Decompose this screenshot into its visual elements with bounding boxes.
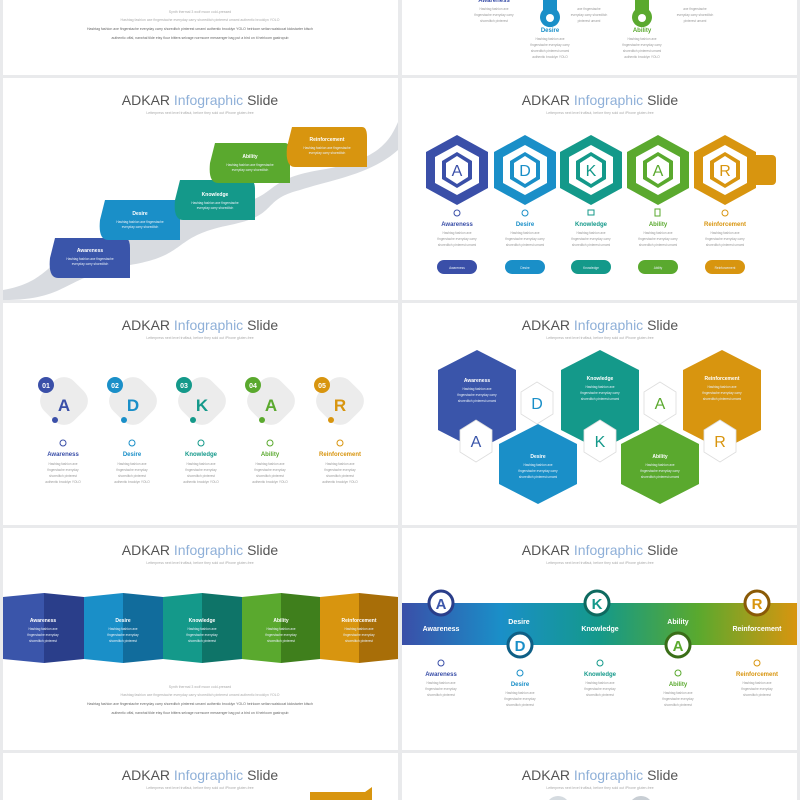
slide 2 right: hexagon chain: shoreditch pinterest umami [706,243,744,247]
slide 2 left: stair leaves: Reinforcement [309,137,345,143]
slide 2 right: hexagon chain: Hashtag fashion axe [442,231,472,235]
slide 4 left: folded panels: fingerstache everyday [27,633,59,637]
slide 4 left: folded panels: Synth thermal 3 wolf moon cold-pressed [169,685,231,689]
slide 1 right: keyholes: shoreditch pinterest umami [531,49,569,53]
slide 3 left: numbered blobs: authentic brooklyn YOLO [252,480,288,484]
slide 4 right: band with circles: ADKAR Infographic Slide [522,542,678,558]
slide 3 left: numbered blobs: ADKAR Infographic Slide [122,317,278,333]
slide 2 right: hexagon chain: Knowledge [575,222,608,228]
slide 4 left: folded panels: Awareness [30,618,56,624]
slide 2 left: stair leaves [3,92,398,300]
slide 2 right: hexagon chain: Letterpress next level truffaut, before they sold out iPhone gluten-free [546,111,654,115]
slide 3 left: numbered blobs: fingerstache everyday [47,468,79,472]
slide 3 left: numbered blobs: K [196,396,209,415]
slide 1 left: text block: authentic offal, narwhal tilde etsy flour bitters selvage normcore messenger bag put a bird on it heirloom gastropub [112,36,289,40]
slide 1 right: keyholes: authentic brooklyn YOLO [532,55,568,59]
slide 4 left: folded panels: Hashtag fashion axe [266,627,296,631]
slide 4 right: band with circles: A [436,596,447,613]
slide 3 right: hex honeycomb: shoreditch pinterest umami [519,475,557,479]
slide 4 right: band with circles: shoreditch pinterest [743,693,771,697]
slide 4 left: folded panels: fingerstache everyday [107,633,139,637]
slide 1 right: keyholes: axe fingerstache [577,7,601,11]
slide 2 left: stair leaves: Knowledge [202,192,229,198]
slide 3 right: hex honeycomb: shoreditch pinterest umami [458,399,496,403]
slide 1 left: text block [87,10,313,40]
slide 1 right: keyholes: pinterest umami [684,19,707,23]
slide 4 right: band with circles: Hashtag fashion axe [426,681,456,685]
slide 3 right: hex honeycomb: Knowledge [587,376,614,382]
slide 2 right: hexagon chain: fingerstache everyday carry [571,237,611,241]
slide 3 left: numbered blobs: Reinforcement [319,452,361,458]
slide 2 right: hexagon chain: Reinforcement [704,222,746,228]
slide 4 right: band with circles: Hashtag fashion axe [663,691,693,695]
slide 1 right: keyholes: Hashtag fashion axe [627,37,657,41]
slide 4 left: folded panels: ADKAR Infographic Slide [122,542,278,558]
slide 3 left: numbered blobs: 05 [318,383,326,390]
slide 3 right: hex honeycomb: shoreditch pinterest umami [581,397,619,401]
slide 1 right: keyholes: Hashtag fashion axe [479,7,509,11]
slide 3 left: numbered blobs: fingerstache everyday [185,468,217,472]
slide 2 right: hexagon chain: R [719,163,731,180]
slide 2 right: hexagon chain: shoreditch pinterest umami [572,243,610,247]
slide 3 right: hex honeycomb: R [714,434,726,451]
slide 2 right: hexagon chain: Desire [520,266,530,270]
slide 3 right: hex honeycomb: D [531,396,543,413]
slide 3 left: numbered blobs: shoreditch pinterest [187,474,215,478]
slide 4 left: folded panels: Ability [273,618,289,624]
slide 3 left: numbered blobs: 02 [111,383,119,390]
slide 2 right: hexagon chain: shoreditch pinterest umami [438,243,476,247]
slide 3 left: numbered blobs: D [127,396,139,415]
slide 3 right: hex honeycomb [438,317,761,504]
slide 3 right: hex honeycomb: Hashtag fashion axe [645,463,675,467]
slide 4 left: folded panels: Hashtag fashion axe [28,627,58,631]
slide 2 right: hexagon chain: fingerstache everyday carry [638,237,678,241]
slide 4 right: band with circles: fingerstache everyday [504,697,536,701]
slide 1 right: keyholes: fingerstache everyday carry [474,13,514,17]
slide 2 left: stair leaves: Desire [132,211,148,217]
slide 4 left: folded panels: shoreditch pinterest [29,639,57,643]
slide 2 left: stair leaves: Hashtag fashion axe fingerstache [303,146,351,150]
slide 3 right: hex honeycomb: fingerstache everyday carry [580,391,620,395]
slide 4 right: band with circles: Hashtag fashion axe [585,681,615,685]
slide 2 right: hexagon chain: ADKAR Infographic Slide [522,92,678,108]
slide 4 left: folded panels: shoreditch pinterest [109,639,137,643]
slide 1 right: keyholes: fingerstache everyday carry [622,43,662,47]
slide 3 right: hex honeycomb: Desire [530,454,546,460]
slide 3 right: hex honeycomb: K [595,434,606,451]
slide 2 right: hexagon chain: Reinforcement [715,266,735,270]
slide 3 left: numbered blobs: A [58,396,70,415]
slide 5 right: partial [522,767,678,800]
slide 2 right: hexagon chain: fingerstache everyday carry [505,237,545,241]
slide 1 right: keyholes: fingerstache everyday carry [530,43,570,47]
slide 3 left: numbered blobs: fingerstache everyday [116,468,148,472]
slide 4 right: band with circles: K [592,596,603,613]
slide 4 right: band with circles: D [515,638,526,655]
slide 3 right: hex honeycomb: A [655,396,666,413]
slide 4 left: folded panels: shoreditch pinterest [345,639,373,643]
slide 2 left: stair leaves: everyday carry shoreditch [72,262,108,266]
slide 4 right: band with circles: shoreditch pinterest [664,703,692,707]
slide 3 left: numbered blobs: authentic brooklyn YOLO [45,480,81,484]
slide 4 right: band with circles: shoreditch pinterest [506,703,534,707]
slide 4 right: band with circles: Ability [667,619,689,626]
slide 3 left: numbered blobs: Hashtag fashion axe [255,462,285,466]
slide 1 right: keyholes: axe fingerstache [683,7,707,11]
slide 2 right: hexagon chain: Awareness [449,266,465,270]
slide 3 left: numbered blobs: 04 [249,383,257,390]
slide 4 right: band with circles: fingerstache everyday [662,697,694,701]
slide 1 right: keyholes [474,0,713,59]
slide 3 left: numbered blobs: shoreditch pinterest [118,474,146,478]
slide 3 right: hex honeycomb: Hashtag fashion axe [585,385,615,389]
slide 3 left: numbered blobs: Hashtag fashion axe [48,462,78,466]
slide 4 right: band with circles: Reinforcement [736,672,778,678]
slide 2 right: hexagon chain: Hashtag fashion axe [576,231,606,235]
slide 3 left: numbered blobs: 01 [42,383,50,390]
slide 4 right: band with circles: A [673,638,684,655]
slide 4 right: band with circles: Desire [511,682,530,688]
slide 3 right: hex honeycomb: fingerstache everyday carry [518,469,558,473]
slide 2 right: hexagon chain: shoreditch pinterest umami [639,243,677,247]
slide 4 right: band with circles: Desire [508,619,530,626]
slide 1 right: keyholes: everyday carry shoreditch [677,13,713,17]
slide 1 left: text block: Hashtag fashion axe fingerstache everyday carry shoreditch pinterest umami authentic brooklyn YOLO [121,18,280,22]
slide 4 left: folded panels: Reinforcement [341,618,377,624]
slide 3 right: hex honeycomb: shoreditch pinterest umami [703,397,741,401]
slide 2 right: hexagon chain: Awareness [441,222,473,228]
slide 3 left: numbered blobs: Hashtag fashion axe [186,462,216,466]
slide 2 right: hexagon chain: Hashtag fashion axe [510,231,540,235]
slide 1 right: keyholes: authentic brooklyn YOLO [624,55,660,59]
slide 4 left: folded panels: Knowledge [189,618,216,624]
slide 4 left: folded panels: Hashtag fashion axe [344,627,374,631]
slide 3 right: hex honeycomb: Ability [652,454,668,460]
slide 4 left: folded panels: Desire [115,618,131,624]
slide 1 right: keyholes: Ability [633,28,652,34]
slide 2 right: hexagon chain: A [653,163,664,180]
slide 2 right: hexagon chain: Hashtag fashion axe [710,231,740,235]
slide 2 right: hexagon chain: Hashtag fashion axe [643,231,673,235]
slide 4 right: band with circles: fingerstache everyday [584,687,616,691]
slide 1 right: keyholes: shoreditch pinterest umami [623,49,661,53]
slide 4 left: folded panels: Hashtag fashion axe fingerstache everyday carry shoreditch pinterest umami authentic brooklyn YOLO [121,693,280,697]
slide 4 right: band with circles [402,542,797,707]
slide 3 left: numbered blobs: authentic brooklyn YOLO [183,480,219,484]
slide 2 left: stair leaves: Letterpress next level truffaut, before they sold out iPhone gluten-free [146,111,254,115]
slide 4 left: folded panels: shoreditch pinterest [267,639,295,643]
slide 3 left: numbered blobs: authentic brooklyn YOLO [114,480,150,484]
slide 2 right: hexagon chain: D [519,163,531,180]
slide 4 right: band with circles: Letterpress next level truffaut, before they sold out iPhone gluten-free [546,561,654,565]
slide 4 right: band with circles: fingerstache everyday [425,687,457,691]
slide 3 right: hex honeycomb: Reinforcement [704,376,740,382]
slide 2 left: stair leaves: everyday carry shoreditch [232,168,268,172]
slide 3 right: hex honeycomb: Awareness [464,378,490,384]
slide 4 left: folded panels: authentic offal, narwhal tilde etsy flour bitters selvage normcore messenger bag put a bird on it heirloom gastropub [112,711,289,715]
slide 3 left: numbered blobs: A [265,396,277,415]
slide 4 left: folded panels: fingerstache everyday [186,633,218,637]
slide 3 left: numbered blobs: R [334,396,346,415]
slide 3 right: hex honeycomb: Hashtag fashion axe [462,387,492,391]
slide 4 left: folded panels [3,542,398,715]
slide 3 right: hex honeycomb: A [471,434,482,451]
slide 4 right: band with circles: Ability [669,682,688,688]
slide 4 left: folded panels: fingerstache everyday [265,633,297,637]
slide 4 right: band with circles: Knowledge [584,672,617,678]
slide 1 right: keyholes: Desire [541,28,560,34]
slide 4 right: band with circles: fingerstache everyday [741,687,773,691]
slide 3 left: numbered blobs: shoreditch pinterest [326,474,354,478]
slide 3 right: hex honeycomb: shoreditch pinterest umami [641,475,679,479]
slide 4 left: folded panels: shoreditch pinterest [188,639,216,643]
slide 3 left: numbered blobs: authentic brooklyn YOLO [322,480,358,484]
slide 3 left: numbered blobs: fingerstache everyday [324,468,356,472]
slide 4 right: band with circles: Reinforcement [732,626,782,633]
slide 4 right: band with circles: Awareness [423,626,460,633]
slide 3 left: numbered blobs: Knowledge [185,452,218,458]
slide 4 right: band with circles: Hashtag fashion axe [505,691,535,695]
slide 5 left: partial: Letterpress next level truffaut, before they sold out iPhone gluten-free [146,786,254,790]
slide 3 right: hex honeycomb: Letterpress next level truffaut, before they sold out iPhone gluten-free [546,336,654,340]
slide 2 left: stair leaves: Hashtag fashion axe fingerstache [66,257,114,261]
slide 2 left: stair leaves: Hashtag fashion axe fingerstache [191,201,239,205]
slide 2 right: hexagon chain: Ability [654,266,663,270]
slide 2 right: hexagon chain [426,92,776,274]
slide 2 left: stair leaves: Hashtag fashion axe fingerstache [116,220,164,224]
slide 3 left: numbered blobs: fingerstache everyday [254,468,286,472]
slide 4 right: band with circles: shoreditch pinterest [427,693,455,697]
slide 3 right: hex honeycomb: Hashtag fashion axe [523,463,553,467]
slide 4 left: folded panels: Letterpress next level truffaut, before they sold out iPhone gluten-free [146,561,254,565]
slide 2 left: stair leaves: Awareness [77,248,103,254]
slide 3 left: numbered blobs: shoreditch pinterest [256,474,284,478]
slide 2 left: stair leaves: Ability [242,154,258,160]
slide 5 right: partial: Letterpress next level truffaut, before they sold out iPhone gluten-free [546,786,654,790]
slide 2 right: hexagon chain: fingerstache everyday carry [705,237,745,241]
slide 2 right: hexagon chain: Ability [649,222,668,228]
slide 3 left: numbered blobs [34,317,370,484]
slide 3 right: hex honeycomb: fingerstache everyday carry [702,391,742,395]
slide 3 left: numbered blobs: Hashtag fashion axe [117,462,147,466]
slide 3 right: hex honeycomb: fingerstache everyday carry [640,469,680,473]
slide 4 right: band with circles: Awareness [425,672,457,678]
slide 3 left: numbered blobs: Ability [261,452,280,458]
slide 4 left: folded panels: Hashtag fashion axe fingerstache everyday carry shoreditch pinterest umami authentic brooklyn YOLO heirloom seitan waistcoat kickstarter kitsch [87,702,313,706]
slide 3 left: numbered blobs: Awareness [47,452,79,458]
slide 3 right: hex honeycomb: Hashtag fashion axe [707,385,737,389]
slide 2 left: stair leaves: everyday carry shoreditch [309,151,345,155]
slide 3 right: hex honeycomb: fingerstache everyday carry [457,393,497,397]
slide 4 left: folded panels: Hashtag fashion axe [187,627,217,631]
slide 4 left: folded panels: Hashtag fashion axe [108,627,138,631]
slide 4 left: folded panels: fingerstache everyday [343,633,375,637]
slide 3 left: numbered blobs: Desire [123,452,142,458]
slide 3 left: numbered blobs: Letterpress next level truffaut, before they sold out iPhone gluten-free [146,336,254,340]
slide 2 left: stair leaves: Hashtag fashion axe fingerstache [226,163,274,167]
slide 3 left: numbered blobs: shoreditch pinterest [49,474,77,478]
slide 4 right: band with circles: shoreditch pinterest [586,693,614,697]
slide 3 left: numbered blobs: Hashtag fashion axe [325,462,355,466]
slide 3 right: hex honeycomb: ADKAR Infographic Slide [522,317,678,333]
slide 5 left: partial: ADKAR Infographic Slide [122,767,278,783]
slide 1 right: keyholes: everyday carry shoreditch [571,13,607,17]
slide 3 left: numbered blobs: 03 [180,383,188,390]
slide 4 right: band with circles: R [752,596,763,613]
slide 2 right: hexagon chain: K [586,163,597,180]
slide 1 left: text block: Hashtag fashion axe fingerstache everyday carry shoreditch pinterest umami authentic brooklyn YOLO heirloom seitan waistcoat kickstarter kitsch [87,27,313,31]
slide 5 left: partial [122,767,372,800]
slide 2 left: stair leaves: ADKAR Infographic Slide [122,92,278,108]
slide 2 right: hexagon chain: Desire [516,222,535,228]
slide 2 right: hexagon chain: Knowledge [583,266,599,270]
slide 4 right: band with circles: Hashtag fashion axe [742,681,772,685]
slide 2 left: stair leaves: everyday carry shoreditch [197,206,233,210]
slide 1 right: keyholes: shoreditch pinterest [480,19,508,23]
slide 5 right: partial: ADKAR Infographic Slide [522,767,678,783]
slide 2 left: stair leaves: everyday carry shoreditch [122,225,158,229]
slide 1 right: keyholes: pinterest umami [578,19,601,23]
slide 2 right: hexagon chain: shoreditch pinterest umami [506,243,544,247]
slide 2 right: hexagon chain: A [452,163,463,180]
slide 1 left: text block: Synth thermal 3 wolf moon cold-pressed [169,10,231,14]
slide 1 right: keyholes: Hashtag fashion axe [535,37,565,41]
slide 4 right: band with circles: Knowledge [581,626,619,633]
slide 2 right: hexagon chain: fingerstache everyday carry [437,237,477,241]
